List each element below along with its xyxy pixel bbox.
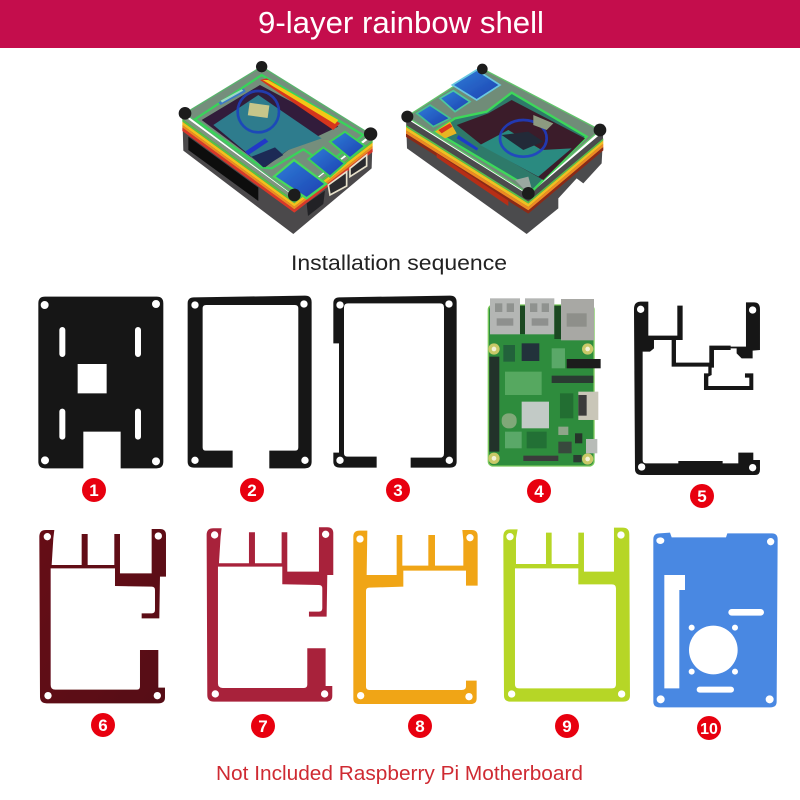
photo: assembled case, view two	[401, 64, 606, 234]
badge 5	[690, 484, 714, 508]
layer 9: lime frame	[503, 528, 630, 702]
badge 10: 10	[700, 721, 718, 738]
badge 8: 8	[415, 717, 425, 736]
layer 2: black frame	[188, 296, 312, 468]
blue USB windows	[330, 132, 365, 158]
footnote: Not Included Raspberry Pi Motherboard	[216, 763, 583, 785]
layer 1: black base plate	[38, 297, 163, 468]
badge 1: 1	[89, 481, 99, 500]
layer 7: crimson frame	[207, 527, 333, 702]
badge 7: 7	[258, 717, 268, 736]
badge 4: 4	[534, 482, 544, 501]
badge 1	[82, 478, 106, 502]
badge 7	[251, 714, 275, 738]
layer 8: orange frame	[353, 530, 478, 704]
badge 2: 2	[247, 481, 257, 500]
ports	[307, 191, 325, 216]
badge 6	[91, 713, 115, 737]
blue USB windows	[452, 70, 500, 100]
badge 5: 5	[697, 487, 707, 506]
badge 2	[240, 478, 264, 502]
badge 6: 6	[98, 716, 108, 735]
layer 6: dark red frame	[39, 529, 166, 703]
title: 9-layer rainbow shell	[258, 5, 544, 40]
badge 3: 3	[393, 481, 403, 500]
badge 8	[408, 714, 432, 738]
badge 9: 9	[562, 717, 572, 736]
USB and ethernet ports	[490, 298, 520, 334]
badge 3	[386, 478, 410, 502]
layer 4: Raspberry Pi board	[488, 298, 601, 466]
badge 4	[527, 479, 551, 503]
badge 10	[697, 716, 721, 740]
layer 5: black thin frame	[634, 302, 760, 475]
layer 10: blue top plate	[653, 533, 778, 707]
layer 3: black frame with thin side	[333, 296, 457, 468]
photo: assembled case, view one	[179, 61, 377, 234]
header banner	[0, 0, 800, 48]
badge 9	[555, 714, 579, 738]
heading: installation sequence: Installation sequence	[291, 252, 507, 275]
